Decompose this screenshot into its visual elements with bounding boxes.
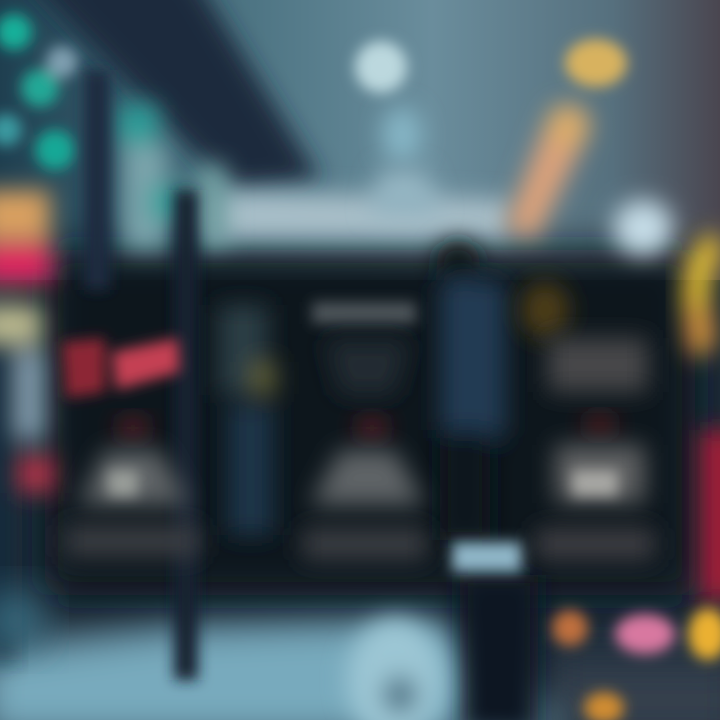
grey card [555,445,645,503]
grey card [310,450,425,505]
dark shield shape [325,340,410,395]
central figure [436,240,538,720]
amber icon [521,282,569,338]
left panel [62,338,200,557]
horizontal light band [205,190,510,240]
light column and ceiling lamp [355,41,440,215]
white highlight [108,470,138,496]
heading bar [312,302,416,324]
floor figure [347,618,443,720]
bottom-right colour lights [552,608,720,720]
diagonal dark beam [20,0,320,190]
golden lamp [565,39,627,87]
red chart blocks [62,338,180,398]
right red strip [700,430,720,600]
central dark board [45,250,695,595]
footer bar [65,525,200,557]
right panel [521,282,655,560]
teal and pale blocks [118,105,227,250]
left colour strip [0,190,54,493]
right white glow [613,200,673,256]
teal diamonds [0,14,78,170]
figure light collar [452,542,522,572]
white highlight [572,470,618,496]
right yellow arc [686,245,720,358]
footer bar [535,528,655,560]
red marker [584,417,616,433]
left dark edge [0,340,14,660]
grey card [78,450,190,505]
middle left strip [218,305,276,535]
floor [0,615,720,720]
footer bar [302,528,427,560]
red marker [356,419,388,437]
heading block [548,338,648,392]
orange raised arm [505,104,590,240]
red marker [117,419,149,437]
vertical dark pillars [84,70,198,680]
middle panel [302,302,427,560]
lower-left shadow [0,590,45,650]
